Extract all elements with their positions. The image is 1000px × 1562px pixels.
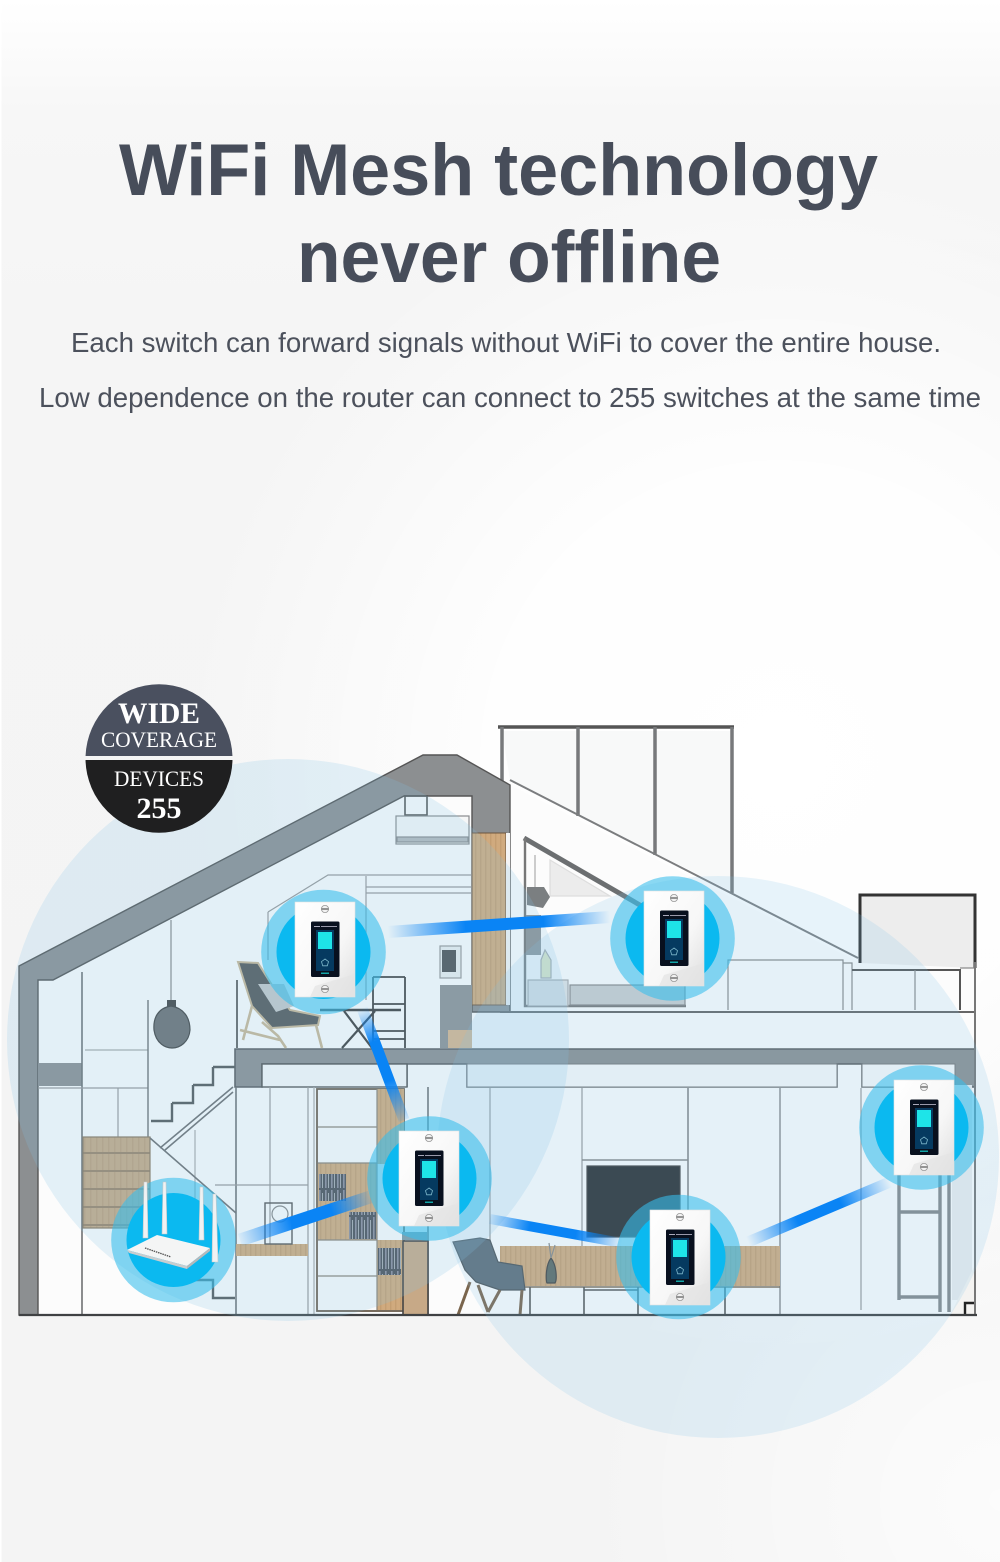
mezzanine partition [268,875,471,1000]
armchair [453,1238,525,1315]
left wall band [38,1063,82,1086]
title [119,130,878,298]
television [587,1166,680,1237]
node: switch 2 [610,876,735,1001]
link: switch 3 to switch 4 [490,1219,622,1243]
node: switch 1 [261,890,386,1014]
link: switch 4 to switch 5 [748,1182,890,1242]
title: WiFi Mesh technology [119,130,878,211]
node: switch 5 [859,1065,984,1190]
stairs [151,1067,235,1298]
right wall [974,962,976,1315]
node: switch 3 [367,1116,492,1241]
lower left console [236,1203,308,1256]
stair timber [83,1137,150,1228]
node: switch 4 [616,1195,741,1319]
router body [127,1235,210,1269]
stair handrail [150,1087,236,1213]
house interior fill [19,755,975,1315]
lounge chair on the mezzanine [237,962,322,1048]
signal links [240,917,890,1243]
desk and shelf on the mezzanine [320,977,405,1048]
right side door [899,1085,975,1315]
upper right kitchen [526,855,685,1006]
title: never offline [297,217,721,298]
badge: wide coverage, 255 devices: DEVICES [114,766,204,791]
description text [39,327,981,413]
coverage circle: right [437,876,999,1438]
node: router [111,1178,236,1302]
upper glazing frame [498,727,734,893]
link: router to switch 3 [240,1197,370,1240]
timber column [472,833,510,1005]
badge: wide coverage, 255 devices: COVERAGE [101,727,217,752]
rooftop box [860,895,975,968]
sloped ceiling on the right [510,780,858,958]
hanging lamp [154,920,190,1048]
link: switch 1 to switch 2 [388,917,610,932]
kitchen appliances [440,946,472,1048]
coverage circle: left [7,759,569,1321]
badge: wide coverage, 255 devices: 255 [136,792,182,825]
router antennas [143,1182,218,1262]
upper right parapets [728,960,975,1010]
floor slab [235,1049,975,1087]
ground line [19,1314,977,1316]
link: switch 1 to switch 3 [362,1008,404,1120]
upper floor line [500,1011,975,1013]
description text: Each switch can forward signals without WiFi to cover the entire house. [71,327,941,358]
air conditioner [396,796,469,844]
interior walls [38,972,861,1315]
house cross-section drawing [19,727,977,1315]
badge: wide coverage, 255 devices [86,684,232,833]
roof band [19,755,510,1315]
vase with flowers [546,1243,556,1283]
timber console [500,1246,780,1315]
badge: wide coverage, 255 devices: WIDE [118,697,200,730]
description text: Low dependence on the router can connect to 255 switches at the same time [39,382,981,413]
full-height shelf [317,1089,428,1315]
